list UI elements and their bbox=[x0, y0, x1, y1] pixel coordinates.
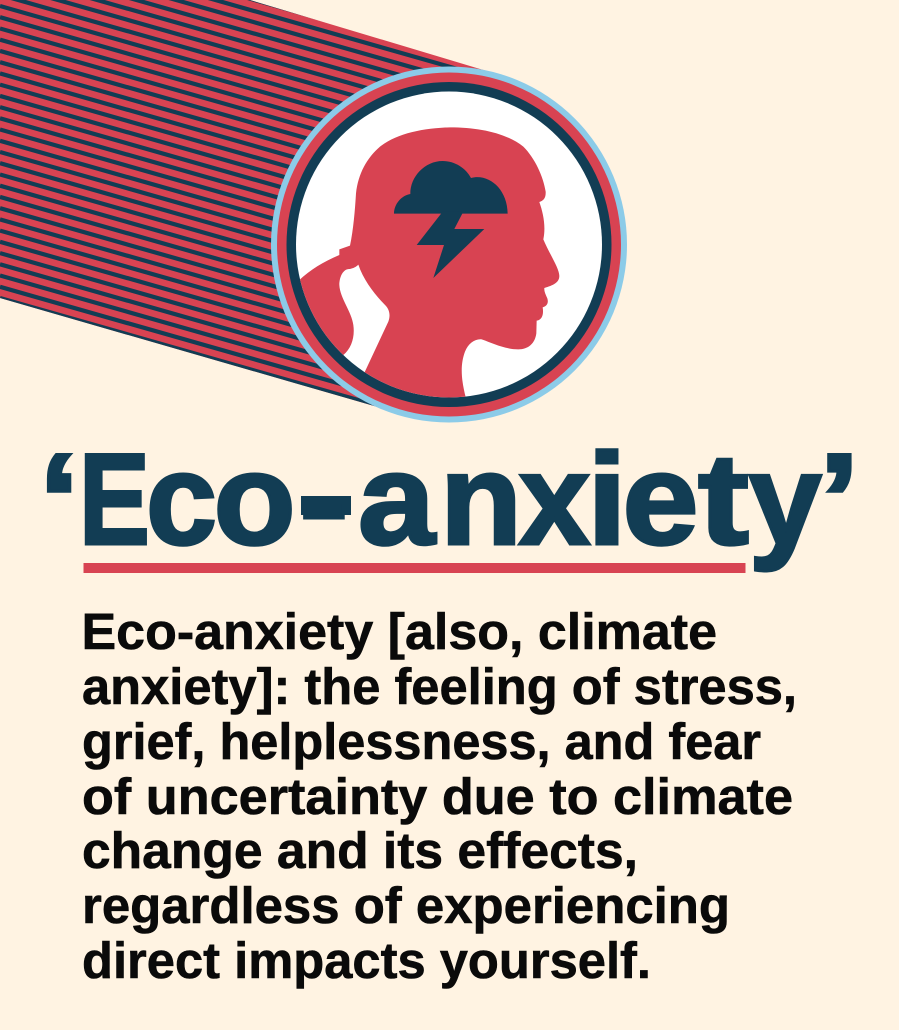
definition text: of uncertainty due to climate bbox=[82, 768, 793, 825]
icon: storm cloud bbox=[394, 161, 508, 214]
title: ‘ bbox=[38, 426, 80, 572]
title: i bbox=[587, 426, 627, 572]
definition text: grief, helplessness, and fear bbox=[82, 713, 761, 770]
title: E bbox=[79, 426, 150, 572]
title: y bbox=[749, 426, 822, 572]
definition text: direct impacts yourself. bbox=[82, 932, 651, 989]
title underline bbox=[84, 563, 746, 573]
icon: head silhouette with ponytail bbox=[300, 127, 560, 398]
title: - bbox=[299, 426, 349, 572]
circular badge bbox=[271, 66, 627, 422]
title: o bbox=[214, 426, 296, 572]
definition text bbox=[82, 603, 797, 989]
title bbox=[38, 426, 860, 572]
title: a bbox=[358, 426, 437, 572]
definition text: Eco-anxiety [also, climate bbox=[82, 603, 717, 660]
title: e bbox=[622, 426, 698, 572]
striped comet trail bbox=[0, 0, 483, 407]
icon: lightning bolt bbox=[417, 212, 484, 278]
title: n bbox=[440, 426, 522, 572]
definition text: change and its effects, bbox=[82, 822, 638, 879]
title: x bbox=[519, 426, 590, 572]
title: ’ bbox=[818, 426, 860, 572]
title: c bbox=[146, 426, 217, 572]
definition text: anxiety]: the feeling of stress, bbox=[82, 658, 797, 715]
title: t bbox=[698, 426, 749, 572]
definition text: regardless of experiencing bbox=[82, 877, 730, 934]
